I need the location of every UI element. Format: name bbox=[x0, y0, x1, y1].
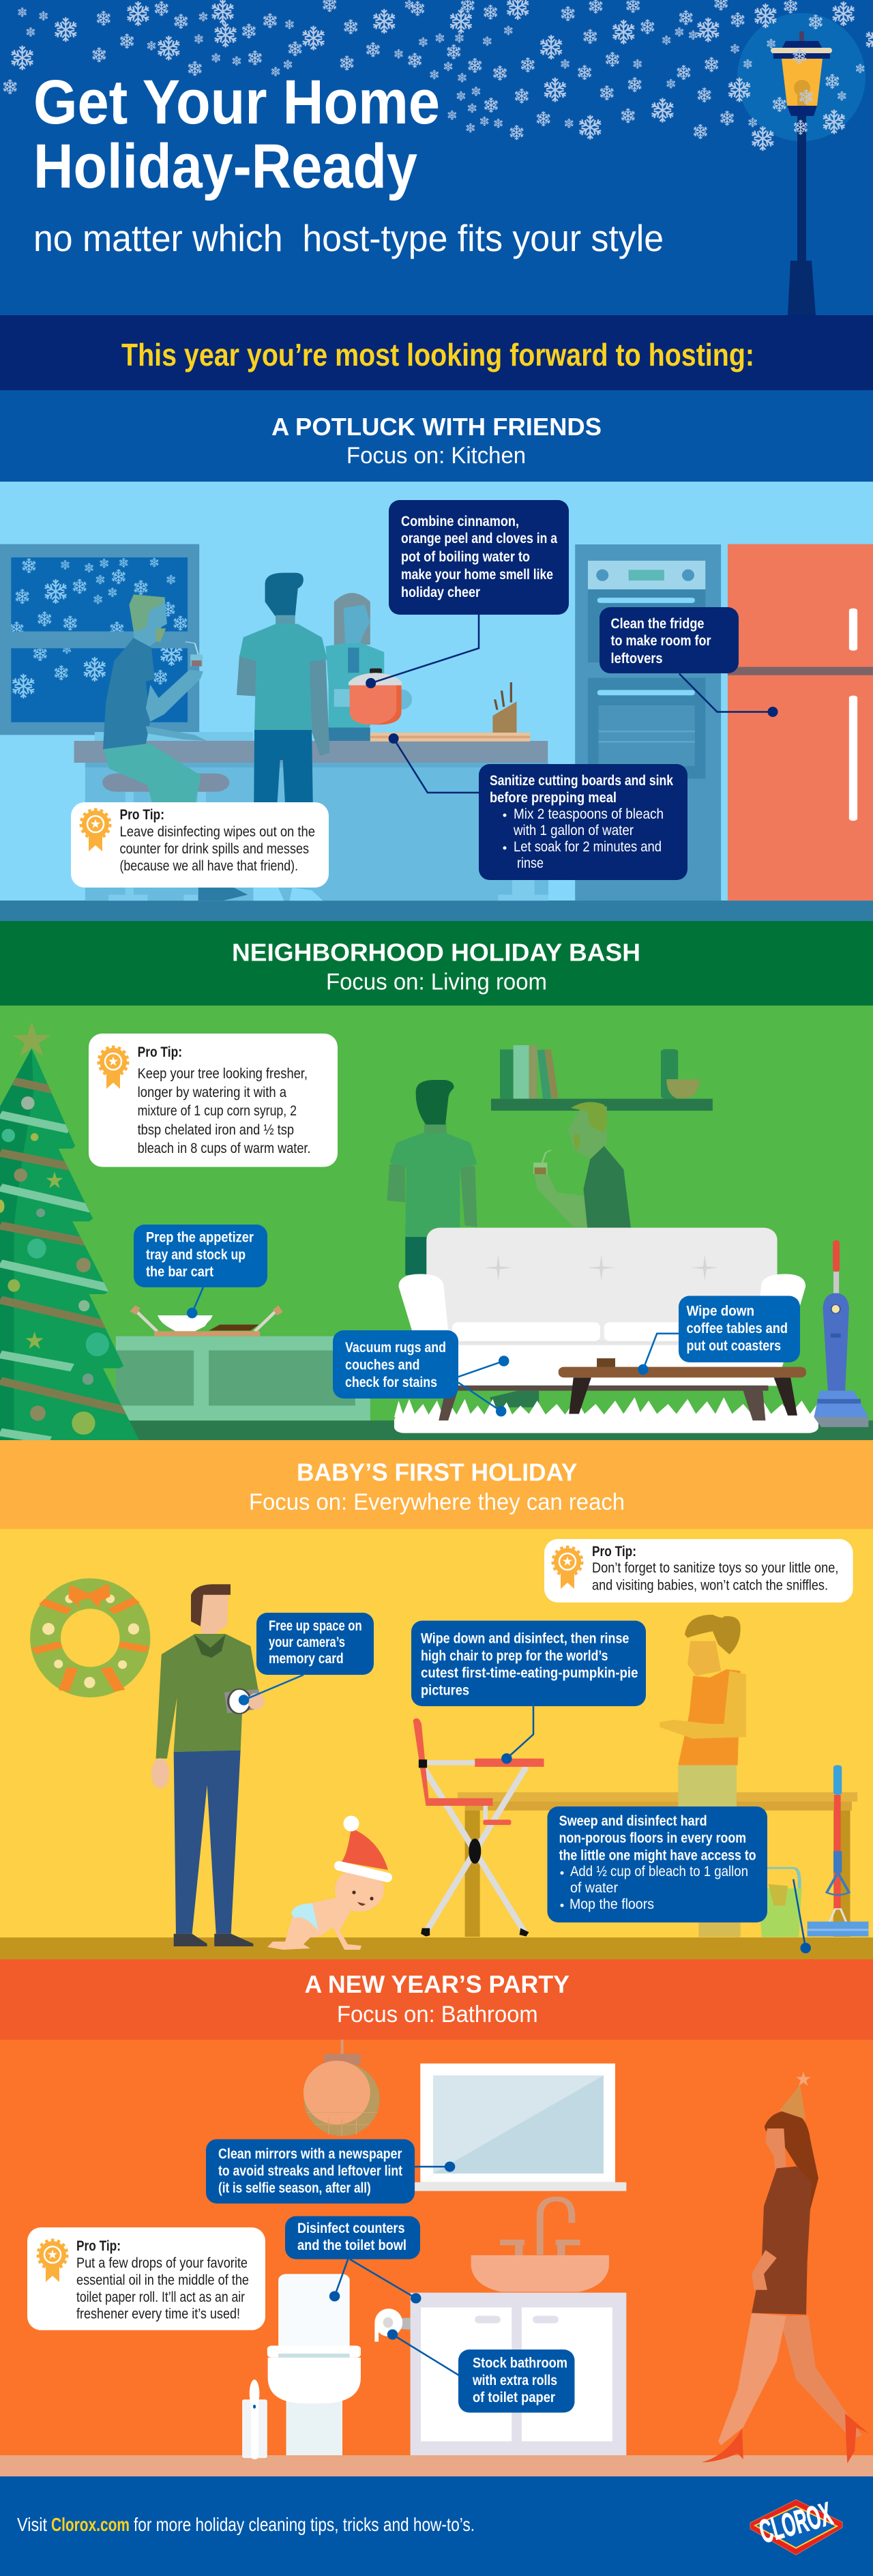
leader lines bbox=[239, 1675, 811, 1953]
pro tip: disinfecting wipes: counter for drink spills and messes bbox=[120, 841, 309, 857]
leader lines bbox=[187, 1287, 679, 1416]
callout: sanitize cutting boards: Mix 2 teaspoons of bleach bbox=[514, 806, 664, 822]
callout: disinfect counters: and the toilet bowl bbox=[297, 2238, 406, 2253]
section heading: baby's first holiday: Focus on: Everywhere they can reach bbox=[249, 1489, 625, 1515]
callout: appetizer tray bbox=[134, 1225, 267, 1287]
callout: clean the fridge bbox=[600, 607, 739, 673]
pro tip: sanitize toys bbox=[544, 1539, 853, 1602]
countertop bbox=[74, 741, 548, 767]
section heading: new year's party bbox=[0, 1959, 873, 2040]
callout: stock toilet paper: with extra rolls bbox=[472, 2373, 557, 2388]
leader lines bbox=[329, 2161, 459, 2375]
toilet brush bbox=[242, 2380, 267, 2459]
icon: medal bbox=[81, 810, 110, 851]
header background bbox=[0, 0, 873, 482]
callout: sanitize cutting boards: Let soak for 2 minutes and bbox=[514, 839, 662, 855]
pro tip: sanitize toys: Pro Tip: bbox=[592, 1544, 636, 1560]
callout: high chair: high chair to prep for the world’s bbox=[421, 1648, 608, 1664]
kitchen scene illustration bbox=[0, 544, 873, 901]
panel: nursery bbox=[0, 1529, 873, 1959]
callout: pot of spices: Combine cinnamon, bbox=[401, 514, 519, 529]
callout: sweep floors bbox=[547, 1806, 767, 1922]
title: Get Your Home bbox=[33, 68, 440, 137]
callout: sweep floors: Sweep and disinfect hard bbox=[559, 1813, 707, 1829]
disco ball bbox=[304, 2040, 380, 2136]
callout: high chair: Wipe down and disinfect, then rinse bbox=[421, 1631, 629, 1647]
panel: kitchen bbox=[0, 482, 873, 922]
pro tip: tree: mixture of 1 cup corn syrup, 2 bbox=[138, 1103, 297, 1119]
pro tip: tree: tbsp chelated iron and ½ tsp bbox=[138, 1122, 294, 1138]
callout: clean mirrors: Clean mirrors with a newspaper bbox=[218, 2146, 402, 2162]
pro tip: sanitize toys: Don’t forget to sanitize toys so your little one, bbox=[592, 1560, 838, 1576]
console cabinet bbox=[116, 1336, 370, 1420]
upright vacuum bbox=[814, 1240, 868, 1427]
section heading: neighborhood bash: Focus on: Living room bbox=[326, 969, 547, 995]
callout: coffee tables: Wipe down bbox=[686, 1303, 754, 1319]
callout: high chair: pictures bbox=[421, 1683, 469, 1699]
section heading: potluck: Focus on: Kitchen bbox=[346, 443, 526, 469]
section heading: potluck bbox=[271, 413, 602, 469]
footer text: Visit bbox=[17, 2514, 47, 2535]
person: standing man bbox=[237, 573, 329, 803]
table bbox=[458, 1792, 857, 1937]
callout: clean mirrors bbox=[206, 2139, 415, 2204]
callout: camera memory card bbox=[256, 1613, 374, 1675]
callout: pot of spices bbox=[389, 500, 569, 615]
footer text: Clorox.com bbox=[51, 2514, 130, 2535]
section heading: new year's party: Focus on: Bathroom bbox=[337, 2002, 538, 2028]
counter base bbox=[85, 732, 548, 901]
mirror bbox=[415, 2064, 626, 2191]
section heading: neighborhood bash bbox=[0, 921, 873, 1006]
pro tip: essential oil: toilet paper roll. It’ll act as an air bbox=[76, 2289, 245, 2305]
wreath bbox=[30, 1579, 150, 1697]
pro tip: tree bbox=[89, 1034, 338, 1167]
leader lines bbox=[366, 615, 778, 793]
title bbox=[33, 68, 440, 201]
callout: clean the fridge: leftovers bbox=[611, 651, 663, 667]
callout: pot of spices: orange peel and cloves in a bbox=[401, 531, 557, 546]
callout: coffee tables: put out coasters bbox=[686, 1338, 781, 1353]
callout: pot of spices: make your home smell like bbox=[401, 567, 553, 583]
callout: disinfect counters bbox=[285, 2216, 420, 2259]
pro tip: essential oil: Put a few drops of your favorite bbox=[76, 2255, 248, 2271]
wall shelf with books bbox=[491, 1045, 713, 1111]
callout: sweep floors: non-porous floors in every room bbox=[559, 1830, 746, 1846]
street lamp bbox=[737, 13, 865, 315]
callout: clean the fridge: Clean the fridge bbox=[611, 616, 704, 632]
callout: sweep floors: Mop the floors bbox=[569, 1897, 654, 1912]
stool bbox=[102, 774, 229, 895]
pro tip: disinfecting wipes: (because we all have that friend). bbox=[120, 858, 298, 874]
callout: vacuum rugs bbox=[333, 1330, 458, 1399]
section heading: baby's first holiday bbox=[0, 1440, 873, 1529]
cutting board bbox=[370, 733, 530, 742]
camera bbox=[224, 1689, 265, 1714]
shag rug bbox=[394, 1397, 818, 1433]
section heading: potluck: A POTLUCK WITH FRIENDS bbox=[271, 413, 602, 441]
callout: sanitize cutting boards bbox=[479, 764, 687, 880]
callout: sanitize cutting boards: rinse bbox=[517, 855, 544, 871]
callout: sweep floors: Add ½ cup of bleach to 1 gallon bbox=[570, 1864, 748, 1879]
callout: sanitize cutting boards: Sanitize cutting boards and sink bbox=[490, 773, 673, 789]
fridge bbox=[728, 544, 873, 901]
title: Holiday-Ready bbox=[33, 132, 417, 201]
baby in santa hat bbox=[267, 1816, 388, 1950]
pro tip: essential oil bbox=[27, 2227, 265, 2330]
pro tip: essential oil: Pro Tip: bbox=[76, 2238, 121, 2254]
toilet paper roll bbox=[374, 2309, 411, 2342]
person: seated man bbox=[103, 594, 248, 901]
icon: medal bbox=[38, 2240, 67, 2282]
footer text bbox=[17, 2514, 475, 2535]
footer bbox=[0, 2476, 873, 2576]
question band bbox=[0, 315, 873, 390]
pro tip: tree: Pro Tip: bbox=[138, 1044, 182, 1060]
callout: clean mirrors: (it is selfie season, after all) bbox=[218, 2180, 371, 2196]
appetizer tray bbox=[130, 1306, 283, 1336]
callout: clean mirrors: to avoid streaks and leftover lint bbox=[218, 2163, 402, 2179]
callout: vacuum rugs: Vacuum rugs and bbox=[345, 1340, 446, 1356]
window with snow bbox=[0, 544, 199, 735]
christmas tree bbox=[0, 1022, 139, 1440]
sofa front legs bbox=[439, 1391, 765, 1420]
callout: sanitize cutting boards: before prepping meal bbox=[490, 790, 617, 806]
callout: sanitize cutting boards: with 1 gallon of water bbox=[513, 823, 634, 838]
person: man with camera bbox=[151, 1584, 259, 1946]
mop bbox=[808, 1765, 868, 1937]
sink and faucet bbox=[471, 2199, 609, 2292]
callout: disinfect counters: Disinfect counters bbox=[297, 2221, 405, 2236]
callout: appetizer tray: Prep the appetizer bbox=[146, 1229, 254, 1246]
icon: medal bbox=[99, 1047, 128, 1089]
person: woman with party hat bbox=[702, 2071, 868, 2463]
callout: camera memory card: memory card bbox=[269, 1651, 344, 1667]
section heading: new year's party: A NEW YEAR’S PARTY bbox=[304, 1970, 569, 1998]
bathroom illustration bbox=[242, 2040, 868, 2463]
pro tip: tree: Keep your tree looking fresher, bbox=[138, 1066, 308, 1082]
callout: vacuum rugs: check for stains bbox=[345, 1375, 437, 1390]
snowfall bbox=[2, 0, 873, 151]
callout: pot of spices: holiday cheer bbox=[401, 585, 480, 600]
pro tip: disinfecting wipes bbox=[71, 802, 329, 888]
subtitle: no matter which host-type fits your style bbox=[33, 217, 664, 259]
icon: medal bbox=[553, 1547, 582, 1589]
section heading: neighborhood bash: NEIGHBORHOOD HOLIDAY BASH bbox=[232, 939, 640, 966]
high chair bbox=[413, 1718, 544, 1937]
footer text: for more holiday cleaning tips, tricks and how-to’s. bbox=[134, 2514, 475, 2535]
living room illustration bbox=[0, 1022, 873, 1440]
pro tip: disinfecting wipes: Leave disinfecting wipes out on the bbox=[120, 824, 315, 840]
pro tip: disinfecting wipes: Pro Tip: bbox=[120, 807, 164, 823]
pro tip: sanitize toys: and visiting babies, won’t catch the sniffles. bbox=[592, 1577, 828, 1594]
person: woman bbox=[660, 1615, 746, 1937]
pro tip: essential oil: freshener every time it’s used! bbox=[76, 2307, 240, 2322]
callout: sweep floors: of water bbox=[570, 1880, 618, 1896]
callout: vacuum rugs: couches and bbox=[345, 1358, 420, 1373]
panel: living room bbox=[0, 1006, 873, 1440]
callout: sweep floors: the little one might have access to bbox=[559, 1847, 756, 1864]
section heading: baby's first holiday: BABY’S FIRST HOLIDAY bbox=[297, 1459, 577, 1487]
callout: high chair bbox=[411, 1621, 646, 1706]
callout: appetizer tray: tray and stock up bbox=[146, 1247, 246, 1263]
person: woman bbox=[326, 593, 412, 741]
callout: stock toilet paper: Stock bathroom bbox=[473, 2355, 567, 2371]
vanity cabinet bbox=[411, 2293, 626, 2455]
callout: camera memory card: Free up space on bbox=[269, 1618, 362, 1634]
callout: camera memory card: your camera’s bbox=[269, 1635, 345, 1650]
bucket with gloves bbox=[758, 1868, 801, 1937]
question band: This year you’re most looking forward to hosting: bbox=[121, 337, 754, 372]
callout: coffee tables bbox=[679, 1296, 800, 1362]
knife block bbox=[492, 682, 517, 733]
sofa bbox=[398, 1228, 805, 1420]
callout: coffee tables: coffee tables and bbox=[686, 1321, 788, 1336]
pro tip: essential oil: essential oil in the middle of the bbox=[76, 2272, 249, 2288]
callout: stock toilet paper bbox=[458, 2350, 574, 2412]
callout: pot of spices: pot of boiling water to bbox=[401, 549, 530, 565]
callout: high chair: cutest first-time-eating-pumpkin-pie bbox=[421, 1665, 638, 1681]
clorox logo bbox=[750, 2496, 842, 2555]
pro tip: tree: bleach in 8 cups of warm water. bbox=[138, 1141, 311, 1156]
person: man from behind bbox=[387, 1080, 477, 1275]
callout: stock toilet paper: of toilet paper bbox=[473, 2390, 555, 2405]
toilet bbox=[267, 2274, 361, 2455]
pot bbox=[349, 669, 402, 724]
person: man with drink bbox=[490, 1102, 631, 1407]
nursery illustration bbox=[30, 1579, 868, 1953]
panel: bathroom bbox=[0, 2040, 873, 2476]
oven unit bbox=[575, 544, 721, 901]
coffee table bbox=[559, 1358, 806, 1416]
callout: appetizer tray: the bar cart bbox=[146, 1264, 213, 1280]
pro tip: tree: longer by watering it with a bbox=[138, 1085, 286, 1100]
callout: clean the fridge: to make room for bbox=[611, 633, 711, 649]
